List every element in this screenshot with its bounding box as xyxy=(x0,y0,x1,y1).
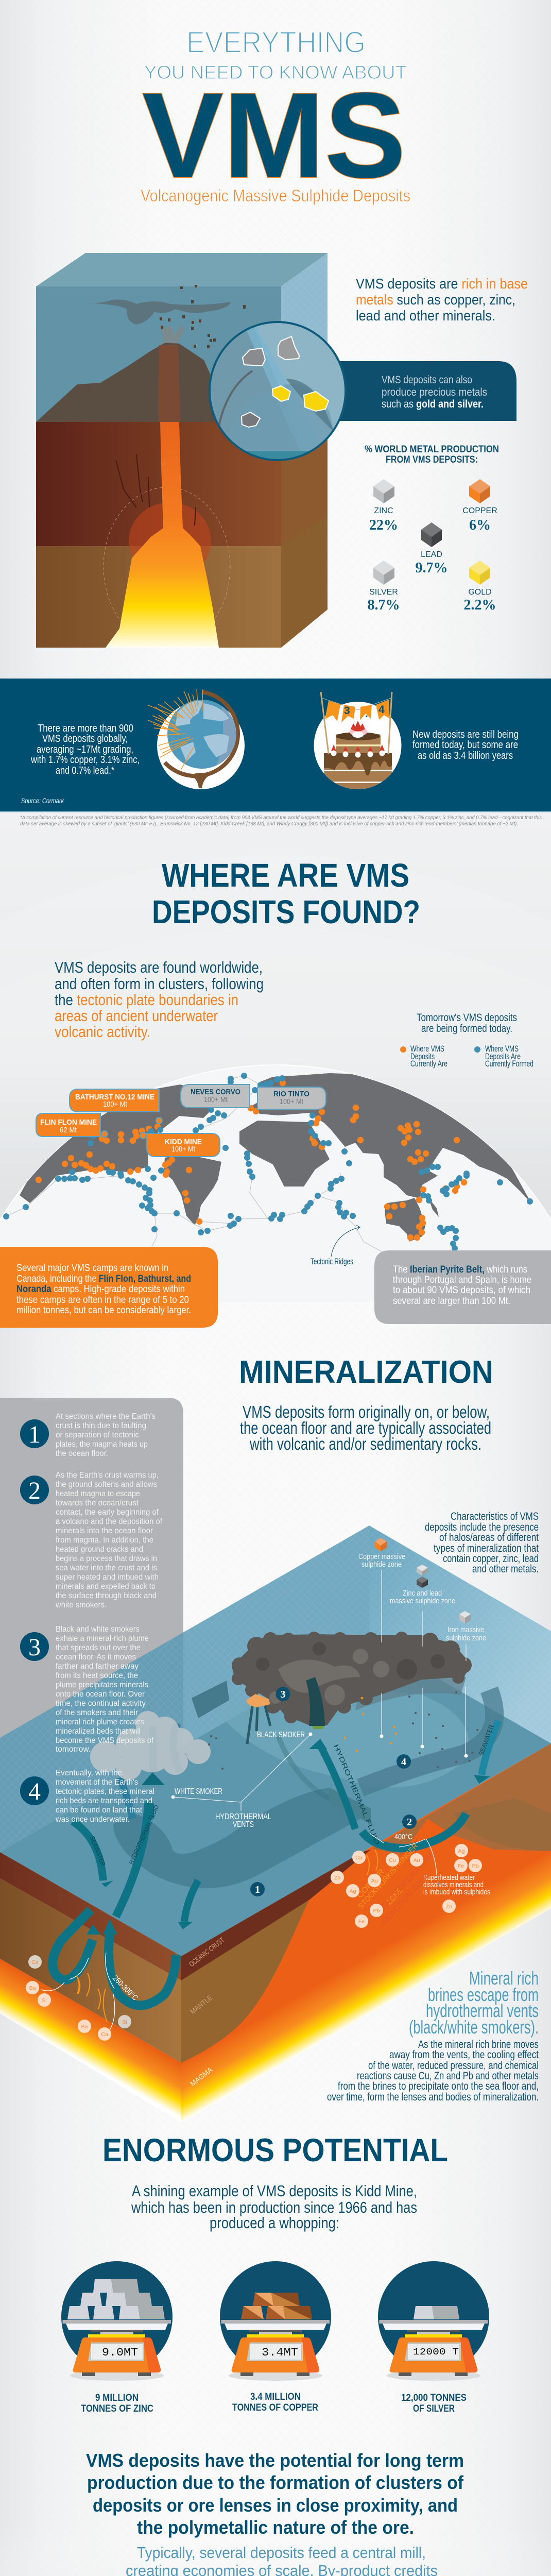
label: Bathurst: 100+ Mt xyxy=(103,1100,127,1109)
step 1 xyxy=(20,1412,156,1458)
panel: Iberian Pyrite Belt: several are larger than 100 Mt. xyxy=(393,1296,510,1307)
smoke cloud above volcano xyxy=(84,285,246,348)
zone: copper: sulphide zone xyxy=(361,1560,402,1569)
text: mineralization intro xyxy=(240,1402,491,1453)
diagram labels: dissolves minerals and xyxy=(423,1880,484,1889)
step 2: contact, the early beginning of xyxy=(56,1508,159,1517)
element symbols: Si xyxy=(42,1997,47,2004)
diagram labels: REACTION ZONE xyxy=(380,1871,432,1926)
teal flow arrows xyxy=(53,1721,498,2005)
icon: silver scale xyxy=(378,2261,489,2381)
step 3: exhale a mineral-rich plume xyxy=(56,1634,149,1643)
diagram labels: BLACK SMOKER xyxy=(257,1731,305,1739)
text: found worldwide: and often form in clusters, following xyxy=(55,975,264,993)
grey steps panel background xyxy=(0,1398,183,1855)
text: 900 deposits: VMS deposits globally, xyxy=(42,733,128,744)
diagram labels: Superheated water xyxy=(423,1873,475,1882)
element symbols xyxy=(29,1848,479,2038)
intro text: metals such as copper, zinc, xyxy=(356,292,515,308)
step 2: minerals and expelled back to xyxy=(56,1582,156,1591)
element symbols: Ca xyxy=(101,2031,108,2038)
gold xyxy=(463,561,496,613)
label: Kidd: 100+ Mt xyxy=(171,1145,195,1154)
text: new deposits: as old as 3.4 billion years xyxy=(418,750,513,761)
step 3: become the VMS deposits of xyxy=(56,1736,154,1745)
label: Neves Corvo xyxy=(181,1084,250,1108)
intro text xyxy=(356,276,528,324)
lead: 9.7% xyxy=(415,560,448,576)
intro text: lead and other minerals. xyxy=(356,308,495,324)
scale captions: TONNES OF COPPER xyxy=(232,2402,318,2413)
callout: precious metals: produce precious metals xyxy=(382,386,487,398)
diagram labels: ZONE xyxy=(385,1886,404,1907)
text: Kidd Mine intro: produced a whopping: xyxy=(210,2214,339,2232)
volcano xyxy=(36,343,225,422)
title: Volcanogenic Massive Sulphide Deposits xyxy=(141,186,410,205)
step 2: minerals into the ocean floor xyxy=(56,1527,153,1535)
title: YOU NEED TO KNOW ABOUT xyxy=(144,62,407,83)
text: found worldwide: areas of ancient underwater xyxy=(55,1007,218,1025)
text: central mill xyxy=(126,2544,438,2576)
icon: birthday cake 3.4 xyxy=(314,692,402,790)
magma chamber and conduit xyxy=(104,422,230,648)
step 3: mineral rich plume creates xyxy=(56,1718,144,1726)
lead: LEAD xyxy=(421,550,442,559)
step 3: farther and farther away xyxy=(56,1662,139,1671)
silver xyxy=(368,561,400,613)
heading: where are VMS deposits found xyxy=(152,857,420,930)
text: mineral rich brines xyxy=(409,1968,539,2038)
diagram labels: WHITE SMOKER xyxy=(175,1787,222,1796)
panel: major VMS camps: these camps are often in the range of 5 to 20 xyxy=(16,1295,189,1306)
step 2: heated ground cracks and xyxy=(56,1545,143,1554)
step 3: Black and white smokers xyxy=(56,1625,140,1634)
diagram labels: HYDROTHERMAL FLUID xyxy=(127,1804,161,1866)
callout: precious metals: such as gold and silver. xyxy=(382,398,484,410)
right earth layers xyxy=(181,1743,551,2123)
text: central mill: Typically, several deposits feed a central mill, xyxy=(137,2544,426,2562)
step 2: super heated and imbued with xyxy=(56,1573,159,1582)
step 3: tomorrow. xyxy=(56,1745,91,1754)
title: VMS xyxy=(142,67,406,204)
number badges: 1 xyxy=(255,1884,260,1895)
zinc xyxy=(369,479,398,533)
text: Kidd Mine intro: A shining example of VMS deposits is Kidd Mine, xyxy=(132,2182,417,2200)
step 3: from its heat source, the xyxy=(56,1671,138,1680)
diagram labels: MAGMA xyxy=(188,2065,214,2088)
diagram labels: HYDROTHERMAL xyxy=(215,1812,271,1821)
panel: major VMS camps: Noranda camps. High-grade deposits within xyxy=(16,1284,185,1295)
text: long term production: the polymetallic nature of the ore. xyxy=(137,2517,414,2538)
label: Flin Flon xyxy=(36,1113,108,1137)
diagram labels: OCEANIC CRUST xyxy=(187,1936,226,1968)
scale captions: 9 MILLION xyxy=(95,2393,139,2403)
icon: black smoker plume xyxy=(232,1632,472,1729)
text: long term production: VMS deposits have the potential for long term xyxy=(86,2450,464,2471)
label: Kidd xyxy=(140,1132,220,1157)
panel: major VMS camps: million tonnes, but can be considerably larger. xyxy=(16,1305,191,1316)
heading: enormous potential: ENORMOUS POTENTIAL xyxy=(102,2132,448,2168)
zone: zinc and lead: Zinc and lead xyxy=(403,1589,442,1598)
map legend: Currently Formed xyxy=(485,1059,533,1069)
map legend xyxy=(400,1044,533,1069)
element symbols: Pb xyxy=(373,1908,380,1914)
scale captions: 12,000 TONNES xyxy=(401,2393,467,2403)
diagram labels: is imbued with sulphides xyxy=(423,1888,490,1896)
zone: iron: Iron massive xyxy=(447,1625,484,1634)
step 4: rich beds are transposed and xyxy=(56,1797,152,1805)
mineralization block diagram xyxy=(0,1526,551,2123)
step 1: or separation of tectonic xyxy=(56,1431,139,1439)
silver: 8.7% xyxy=(368,597,400,613)
text: long term production: deposits or ore lenses in close proximity, and xyxy=(93,2495,458,2516)
diagram labels: VENTS xyxy=(233,1820,254,1829)
diagram labels: SEAWATER xyxy=(88,1835,107,1868)
text: tomorrow's deposits: Tomorrow's VMS deposits xyxy=(417,1012,517,1024)
label: Rio Tinto: RIO TINTO xyxy=(273,1090,309,1098)
step 2: from magma. In addition, the xyxy=(56,1536,153,1545)
text: mineralization intro: with volcanic and/or sedimentary rocks. xyxy=(249,1434,481,1453)
element symbols: Zn xyxy=(334,1875,340,1881)
source: Source: Cormark xyxy=(21,796,64,805)
step 2: white smokers. xyxy=(55,1601,107,1609)
label: tectonic ridges: Tectonic Ridges xyxy=(311,1257,353,1266)
icon: copper scale: 3.4MT xyxy=(262,2346,298,2359)
diagram labels: MANTLE xyxy=(188,1993,214,2015)
label: Bathurst: BATHURST NO.12 MINE xyxy=(75,1093,154,1101)
step 3: ocean floor. As it moves xyxy=(56,1653,136,1662)
number badges: 3 xyxy=(280,1689,285,1700)
element symbols: Fe xyxy=(358,1919,365,1925)
zone: copper: Copper massive xyxy=(358,1552,405,1561)
step 3 xyxy=(20,1625,154,1754)
step 1: 1 xyxy=(28,1421,41,1448)
step 2: 2 xyxy=(28,1477,41,1504)
step 3: of the smokers and their xyxy=(56,1708,138,1717)
panel: Iberian Pyrite Belt: to about 90 VMS deposits, of which xyxy=(393,1285,530,1296)
step 2 xyxy=(20,1471,163,1609)
icon: silver scale: 12000 T xyxy=(413,2347,459,2358)
step 4: can be found on land that xyxy=(56,1806,143,1815)
map legend: Currently Are xyxy=(410,1059,447,1069)
metal production panel: FROM VMS DEPOSITS: xyxy=(386,454,478,465)
zone: zinc and lead xyxy=(390,1565,455,1749)
step 2: the surface through black and xyxy=(56,1591,157,1600)
panel: Iberian Pyrite Belt: The Iberian Pyrite Belt, which runs xyxy=(393,1264,527,1275)
zone: iron: sulphide zone xyxy=(446,1634,486,1642)
label: Rio Tinto xyxy=(257,1087,326,1109)
step 2: towards the ocean/crust xyxy=(56,1499,139,1507)
map legend: Deposits Are xyxy=(485,1052,521,1061)
label: Flin Flon: FLIN FLON MINE xyxy=(40,1118,97,1127)
element markers xyxy=(26,1844,482,2041)
panel: major VMS camps xyxy=(0,1247,218,1328)
label: Neves Corvo: NEVES CORVO xyxy=(191,1088,240,1096)
step 4: 4 xyxy=(28,1778,41,1805)
footnote: data set average is skewed by a subset of ‘giants’ (+30 Mt; e.g., Brunswick No. 12 [230 Mt], Kidd Creek [138 Mt], and Windy Craggy [300 Mt]) and is inclusive of copper-rich and zinc-rich ‘end-members’ (median tonnage of ~2 Mt). xyxy=(20,821,518,827)
diagram labels: COPPER xyxy=(355,1867,386,1900)
text: 900 deposits: There are more than 900 xyxy=(38,723,133,734)
diagram labels: 260-300°C xyxy=(111,1974,140,2003)
copper: 6% xyxy=(469,517,491,533)
element symbols: Ba xyxy=(29,1985,36,1991)
element symbols: Ca xyxy=(31,1959,39,1965)
icon: birthday cake 3.4: . xyxy=(365,708,368,720)
text: found worldwide: the tectonic plate boundaries in xyxy=(55,991,238,1009)
copper xyxy=(462,479,497,533)
step 2: heated magma to escape xyxy=(56,1489,140,1498)
step 3: 3 xyxy=(28,1634,41,1661)
panel: Iberian Pyrite Belt: through Portugal and Spain, is home xyxy=(393,1275,531,1285)
metal production panel: % WORLD METAL PRODUCTION xyxy=(365,444,499,455)
zinc: 22% xyxy=(369,517,398,533)
metal production panel xyxy=(365,444,499,613)
icon: birthday cake 3.4: 3 xyxy=(344,705,350,717)
element symbols: Pb xyxy=(472,1863,479,1869)
copper: COPPER xyxy=(462,506,497,515)
panel: major VMS camps: Canada, including the Flin Flon, Bathurst, and xyxy=(16,1274,191,1284)
icon: white smoker plume xyxy=(90,1711,211,1780)
ocean floor xyxy=(0,1639,551,1956)
tectonic ridges xyxy=(6,1076,391,1257)
icon: globe with pins xyxy=(148,689,245,789)
scale captions: TONNES OF ZINC xyxy=(81,2403,153,2414)
zone: iron xyxy=(446,1611,486,1758)
icon: lava vent xyxy=(246,1694,270,1744)
step 2: As the Earth's crust warms up, xyxy=(56,1471,159,1480)
label: Bathurst xyxy=(70,1089,162,1124)
gold: GOLD xyxy=(468,588,492,597)
dots: where deposits are currently formed xyxy=(6,1076,530,1248)
text: 900 deposits: with 1.7% copper, 3.1% zinc, xyxy=(30,754,140,766)
mineral particles xyxy=(345,1698,396,1751)
gold: 2.2% xyxy=(463,597,496,613)
element symbols: Ag xyxy=(458,1848,465,1854)
element symbols: Ag xyxy=(350,1888,356,1894)
diagram labels: HIGH TEMPERATURE xyxy=(373,1849,437,1918)
diagram labels: HYDROTHERMAL FLUID xyxy=(332,1743,382,1845)
title: EVERYTHING xyxy=(186,26,366,59)
text: tomorrow's deposits xyxy=(417,1012,517,1035)
map legend: Where VMS xyxy=(485,1044,519,1054)
text: brine explanation xyxy=(327,2039,539,2103)
diagram labels: STOCKWORK/STRINGER xyxy=(356,1842,420,1911)
icon: zinc scale xyxy=(61,2261,173,2381)
text: long term production: production due to the formation of clusters of xyxy=(87,2472,464,2493)
icon: zinc scale: 9.0MT xyxy=(102,2346,138,2359)
map legend: Deposits xyxy=(410,1052,435,1061)
stats band xyxy=(0,679,551,812)
label: Flin Flon: 62 Mt xyxy=(60,1126,77,1134)
text: Kidd Mine intro: which has been in production since 1966 and has xyxy=(131,2198,417,2216)
text: found worldwide: VMS deposits are found worldwide, xyxy=(55,958,263,976)
step 1: the ocean floor. xyxy=(56,1449,108,1458)
step 3: mineralized beds that will xyxy=(56,1727,141,1736)
magnifier with ore samples xyxy=(210,322,346,461)
lead xyxy=(415,522,448,576)
text: new deposits xyxy=(412,729,519,761)
text: tomorrow's deposits: are being formed today. xyxy=(421,1023,512,1035)
label: Neves Corvo: 100+ Mt xyxy=(204,1096,228,1104)
dots: where deposits currently are xyxy=(39,1083,464,1238)
element symbols: Si xyxy=(122,2019,127,2025)
element symbols: Fe xyxy=(458,1863,464,1869)
diagram labels: 400°C xyxy=(394,1833,412,1841)
element symbols: Au xyxy=(371,1878,378,1884)
precipitating grey particles xyxy=(209,1692,477,1769)
icon: copper scale xyxy=(220,2261,331,2381)
step 3: time, the continual activity xyxy=(56,1699,146,1708)
callout: precious metals xyxy=(335,361,516,421)
ore rocks xyxy=(242,336,329,427)
element symbols: Ba xyxy=(81,2024,88,2030)
text: new deposits: formed today, but some are xyxy=(412,739,518,751)
element symbols: Cu xyxy=(389,1857,396,1863)
step 1: plates, the magma heats up xyxy=(56,1440,148,1449)
callout: precious metals: VMS deposits can also xyxy=(382,374,472,386)
text: 900 deposits: averaging ~17Mt grading, xyxy=(37,744,133,755)
scale captions: 3.4 MILLION xyxy=(250,2392,301,2402)
element symbols: Au xyxy=(414,1857,420,1863)
text: 900 deposits: and 0.7% lead.* xyxy=(56,765,114,776)
step 3: onto the ocean floor. Over xyxy=(56,1690,145,1699)
text: found worldwide xyxy=(55,958,264,1041)
number badges xyxy=(250,1687,417,1896)
continents xyxy=(20,1073,531,1242)
text: new deposits: New deposits are still being xyxy=(412,729,519,740)
number badges: 2 xyxy=(407,1817,412,1828)
step 2: sea water into the crust and is xyxy=(56,1564,157,1572)
left earth layers xyxy=(0,1852,181,2123)
heading: mineralization: MINERALIZATION xyxy=(239,1354,493,1390)
text: mineralization intro: VMS deposits form originally on, or below, xyxy=(243,1402,490,1421)
step 2: a volcano and the deposition of xyxy=(56,1517,163,1526)
step 1: crust is thin due to faulting xyxy=(56,1421,146,1430)
step 3: that spreads out over the xyxy=(56,1643,141,1652)
label: Kidd: KIDD MINE xyxy=(165,1138,202,1146)
step 3: plume precipitates minerals xyxy=(56,1681,148,1689)
world map xyxy=(0,1064,551,1302)
step 4: tectonic plates, these mineral xyxy=(56,1787,154,1796)
zone: copper xyxy=(358,1538,405,1738)
label: Rio Tinto: 100+ Mt xyxy=(280,1098,303,1106)
zinc: ZINC xyxy=(374,506,393,515)
silver: SILVER xyxy=(369,588,398,597)
heading: where are VMS deposits found: WHERE ARE VMS xyxy=(162,857,409,894)
step 4: was once underwater. xyxy=(55,1815,130,1824)
scale captions xyxy=(81,2392,467,2414)
text: 900 deposits xyxy=(30,723,140,776)
intro text: VMS deposits are rich in base xyxy=(356,276,528,292)
step 4: Eventually, with the xyxy=(56,1769,122,1777)
water column xyxy=(0,1526,551,1956)
heading: where are VMS deposits found: DEPOSITS FOUND? xyxy=(152,893,420,930)
scale captions: OF SILVER xyxy=(413,2403,455,2414)
step 4 xyxy=(20,1769,154,1824)
text: found worldwide: volcanic activity. xyxy=(55,1023,150,1041)
text: Kidd Mine intro xyxy=(131,2182,417,2232)
zone: zinc and lead: massive sulphide zone xyxy=(390,1597,455,1605)
icon: birthday cake 3.4: 4 xyxy=(378,704,385,716)
number badges: 4 xyxy=(401,1756,406,1768)
step 1: At sections where the Earth's xyxy=(56,1412,156,1421)
step 4: movement of the Earth's xyxy=(56,1778,138,1787)
text: long term production xyxy=(86,2450,464,2538)
label: tectonic ridges xyxy=(311,1225,360,1266)
element symbols: Cu xyxy=(355,1855,363,1861)
step 2: begins a process that draws in xyxy=(56,1554,157,1563)
step 2: the ground softens and allows xyxy=(56,1480,157,1489)
diagram labels xyxy=(41,1724,495,2088)
footnote xyxy=(20,815,542,827)
text: characteristics of VMS xyxy=(425,1510,539,1575)
element symbols: Zn xyxy=(446,1904,452,1910)
panel: Iberian Pyrite Belt xyxy=(374,1250,551,1324)
panel: major VMS camps: Several major VMS camps are known in xyxy=(16,1263,168,1274)
diagram labels: SEAWATER xyxy=(477,1724,495,1756)
map legend: Where VMS xyxy=(410,1044,444,1054)
volcano cross-section cube xyxy=(36,253,328,648)
